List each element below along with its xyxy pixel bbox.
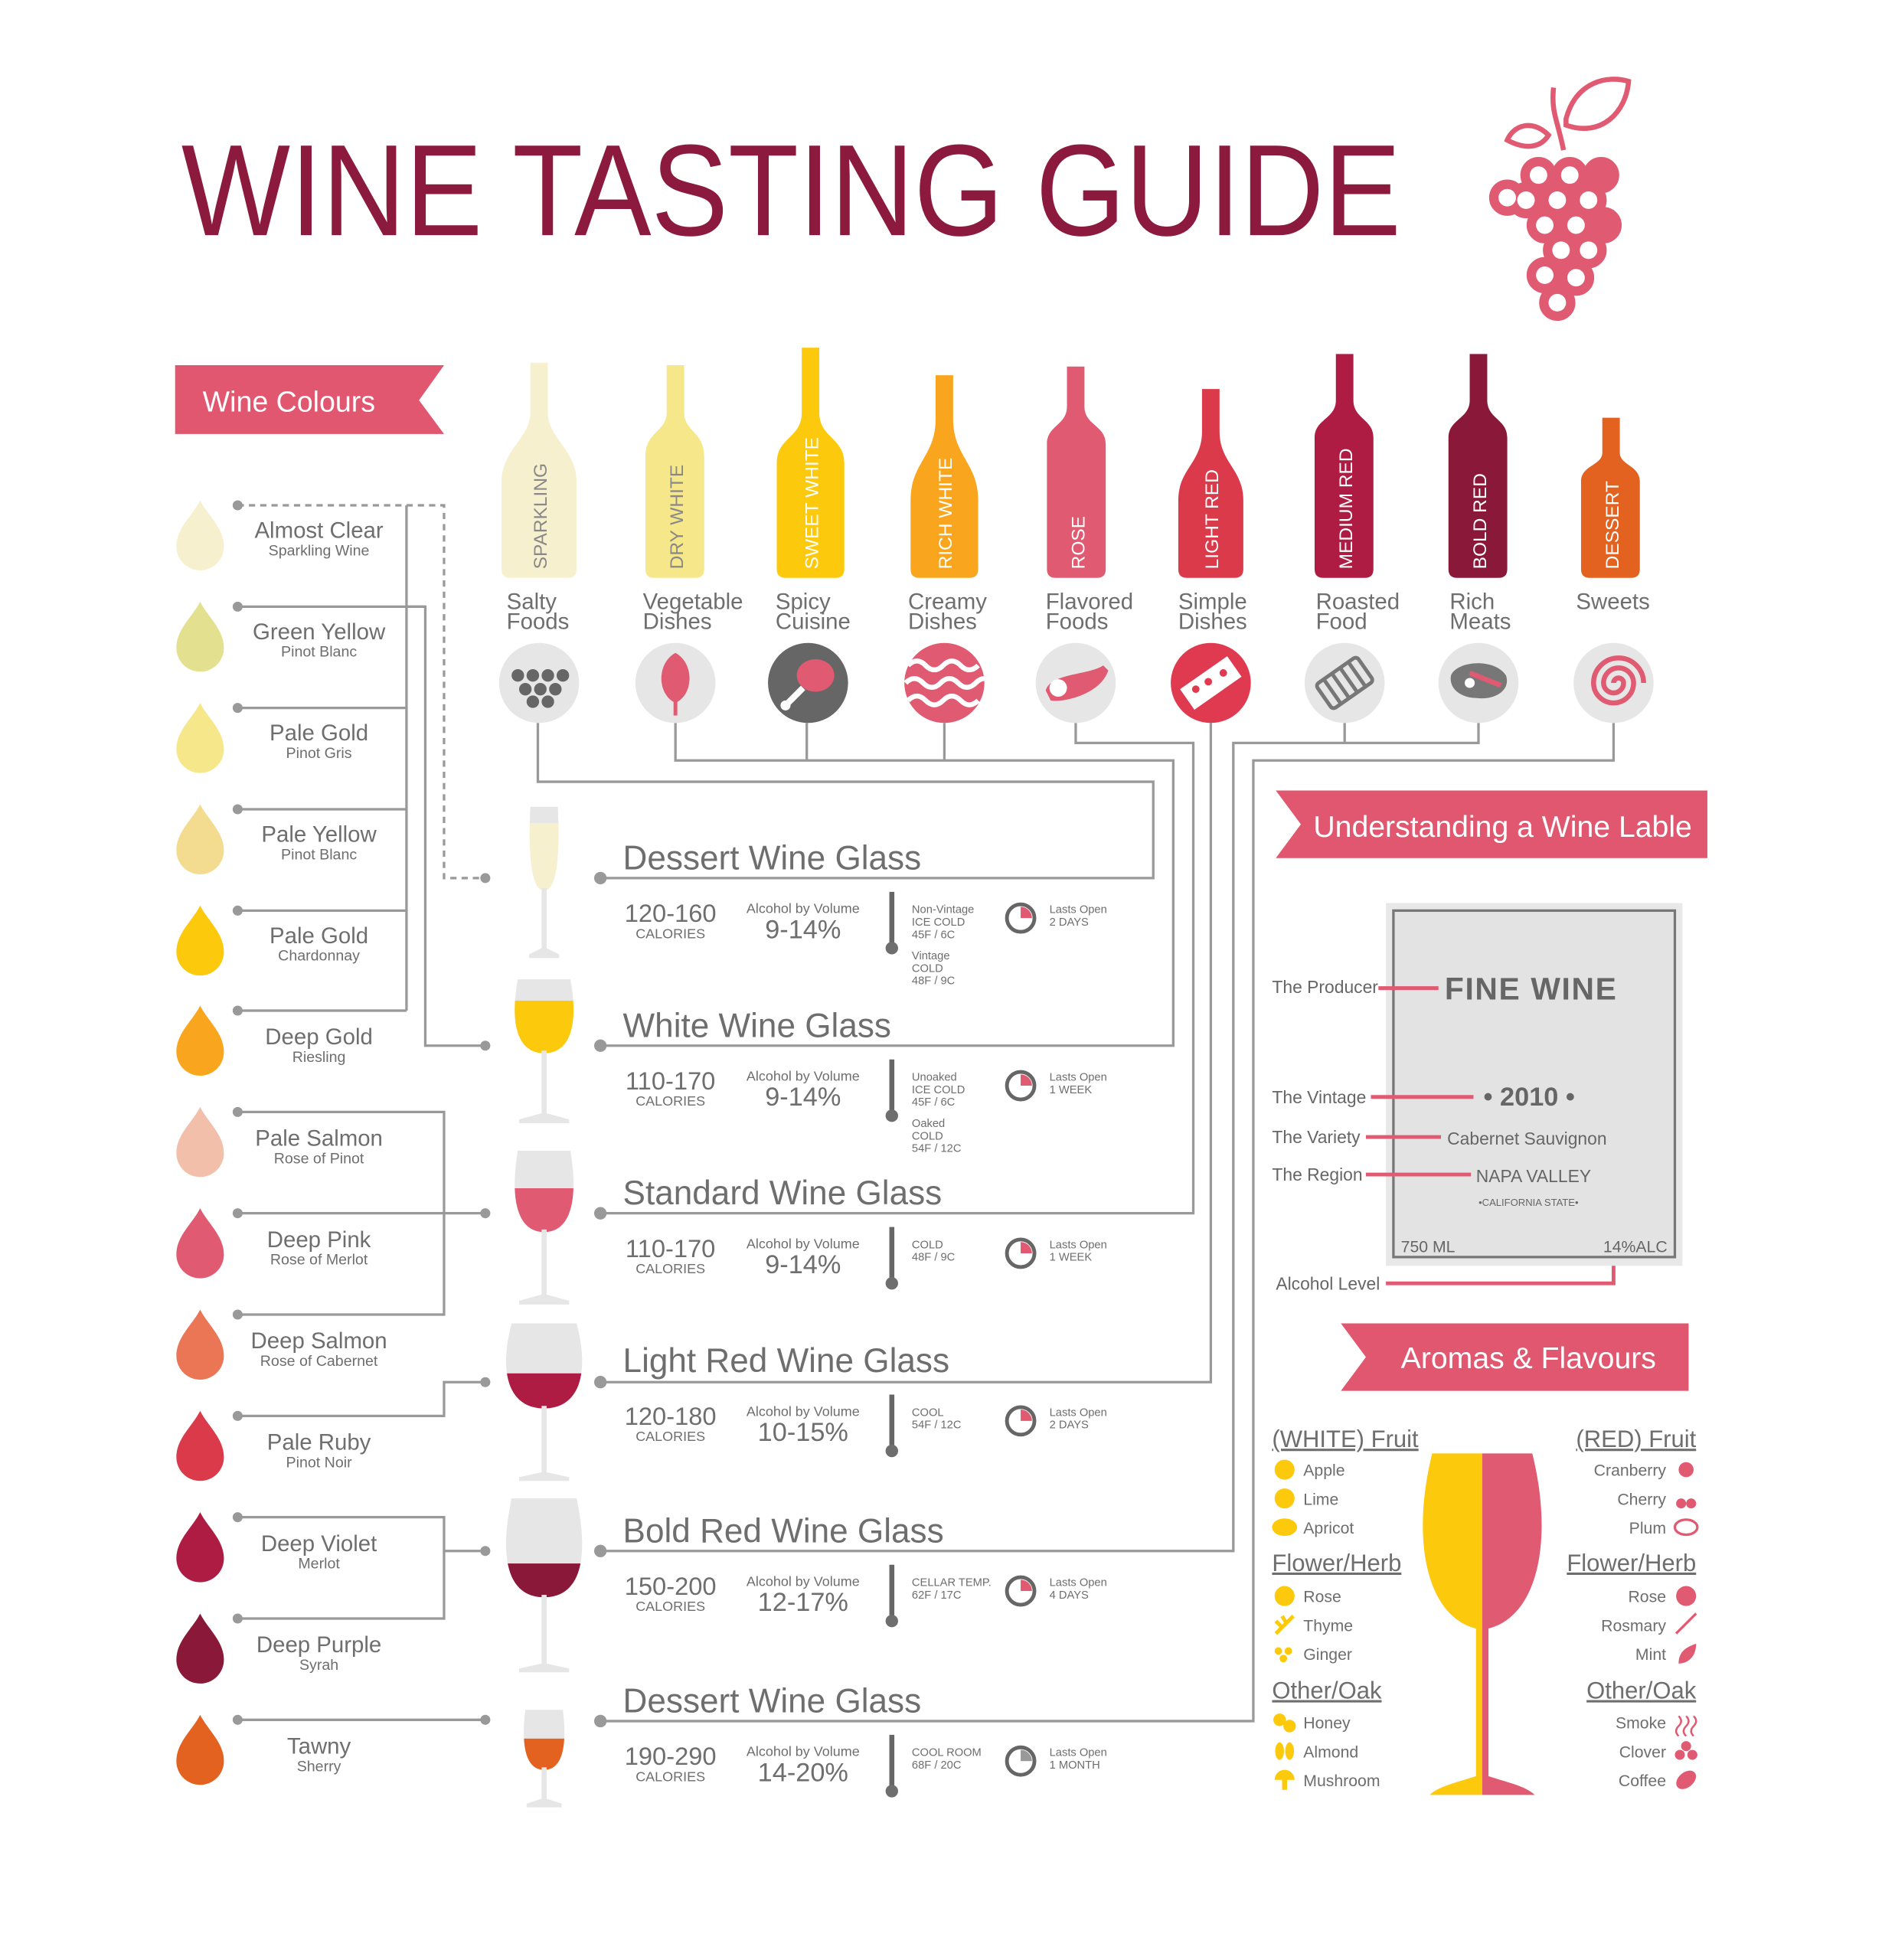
glass rows: Alcohol by Volume bbox=[747, 1403, 860, 1419]
bottles: DRY WHITE bbox=[667, 465, 688, 569]
aromas lists: Thyme bbox=[1303, 1617, 1353, 1635]
glass rows: 12-17% bbox=[758, 1588, 848, 1617]
wine label bbox=[1272, 903, 1682, 1293]
glass rows: COLD bbox=[912, 1239, 943, 1251]
glass rows: 54F / 12C bbox=[912, 1419, 962, 1432]
panel: colour drops: Rose of Pinot bbox=[274, 1150, 364, 1167]
glass rows: Lasts Open bbox=[1050, 904, 1107, 916]
wine label: The Region bbox=[1272, 1165, 1363, 1184]
banner: aromas & flavours: Aromas & Flavours bbox=[1401, 1342, 1656, 1375]
glass rows: 110-170 bbox=[626, 1234, 715, 1263]
aromas lists: Almond bbox=[1303, 1743, 1358, 1761]
panel: colour drops: Green Yellow bbox=[253, 619, 386, 645]
glass rows: CELLAR TEMP. bbox=[912, 1577, 992, 1589]
panel: colour drops: Merlot bbox=[298, 1556, 340, 1573]
food labels: Creamy bbox=[908, 590, 987, 615]
aroma icons bbox=[1272, 1460, 1700, 1793]
bottles: DESSERT bbox=[1603, 481, 1623, 569]
glass rows: Lasts Open bbox=[1050, 1072, 1107, 1084]
glass rows: CALORIES bbox=[635, 1093, 705, 1109]
wine label: The Vintage bbox=[1272, 1087, 1366, 1107]
food labels: Food bbox=[1316, 609, 1367, 635]
panel: colour drops: Rose of Cabernet bbox=[260, 1353, 378, 1370]
glass rows: 1 WEEK bbox=[1050, 1252, 1092, 1264]
wine label: 14%ALC bbox=[1603, 1238, 1668, 1256]
glass rows: 68F / 20C bbox=[912, 1759, 962, 1772]
glass rows: CALORIES bbox=[635, 1261, 705, 1276]
glass rows: Non-Vintage bbox=[912, 904, 974, 916]
aromas glass bbox=[1423, 1453, 1541, 1795]
food labels: Dishes bbox=[908, 609, 977, 635]
panel: colour drops: Pale Ruby bbox=[267, 1429, 371, 1455]
food labels: Rich bbox=[1449, 590, 1495, 615]
wine label: 750 ML bbox=[1401, 1238, 1456, 1256]
aromas lists: Honey bbox=[1303, 1715, 1351, 1733]
food labels: Meats bbox=[1449, 609, 1511, 635]
icon: grapes bbox=[1490, 79, 1629, 320]
aromas lists: Plum bbox=[1629, 1520, 1666, 1537]
glass rows: Alcohol by Volume bbox=[747, 1236, 860, 1251]
glass rows: COOL bbox=[912, 1406, 944, 1419]
aromas lists: Apple bbox=[1303, 1462, 1345, 1480]
glass rows: White Wine Glass bbox=[623, 1007, 891, 1044]
glass rows: Alcohol by Volume bbox=[747, 1744, 860, 1759]
glass rows: 120-180 bbox=[625, 1402, 717, 1430]
bottles: SWEET WHITE bbox=[802, 437, 822, 569]
panel: colour drops: Deep Purple bbox=[256, 1632, 381, 1658]
wine label: Cabernet Sauvignon bbox=[1447, 1129, 1607, 1148]
food labels: Simple bbox=[1178, 590, 1247, 615]
panel: colour drops: Rose of Merlot bbox=[270, 1252, 368, 1269]
glass rows: Lasts Open bbox=[1050, 1747, 1107, 1759]
food labels: Dishes bbox=[643, 609, 712, 635]
wine label: The Variety bbox=[1272, 1127, 1361, 1147]
aromas lists: Cherry bbox=[1617, 1491, 1666, 1508]
glass rows: Lasts Open bbox=[1050, 1577, 1107, 1589]
aromas lists: Coffee bbox=[1619, 1772, 1666, 1790]
glass rows: COOL ROOM bbox=[912, 1747, 982, 1759]
panel: colour drops: Pinot Gris bbox=[286, 745, 352, 762]
aromas lists: Other/Oak bbox=[1272, 1677, 1382, 1704]
aromas lists: Mushroom bbox=[1303, 1772, 1380, 1790]
panel: colour drops: Tawny bbox=[287, 1733, 351, 1759]
glass rows: Dessert Wine Glass bbox=[623, 839, 921, 877]
food labels: Cuisine bbox=[776, 609, 851, 635]
glass rows: ICE COLD bbox=[912, 916, 965, 929]
panel: colour drops: Syrah bbox=[299, 1657, 338, 1674]
aromas lists: Flower/Herb bbox=[1567, 1550, 1696, 1576]
aromas lists: (WHITE) Fruit bbox=[1272, 1426, 1419, 1452]
panel: colour drops: Deep Pink bbox=[267, 1227, 371, 1253]
glass rows: Bold Red Wine Glass bbox=[623, 1512, 944, 1550]
aromas lists: Clover bbox=[1619, 1743, 1666, 1761]
glass rows: Standard Wine Glass bbox=[623, 1174, 942, 1212]
glass rows: 9-14% bbox=[765, 1250, 841, 1279]
food labels: Dishes bbox=[1178, 609, 1247, 635]
glass rows: 45F / 6C bbox=[912, 929, 956, 941]
glass rows: Unoaked bbox=[912, 1072, 957, 1084]
food labels: Vegetable bbox=[643, 590, 743, 615]
aromas lists: Other/Oak bbox=[1586, 1677, 1697, 1704]
panel: colour drops bbox=[176, 500, 387, 1785]
aromas lists: (RED) Fruit bbox=[1576, 1426, 1697, 1452]
glass rows: CALORIES bbox=[635, 926, 705, 941]
glass rows: 2 DAYS bbox=[1050, 916, 1089, 929]
aromas lists: Apricot bbox=[1303, 1520, 1354, 1537]
glass rows: Alcohol by Volume bbox=[747, 901, 860, 916]
wine label: NAPA VALLEY bbox=[1476, 1166, 1591, 1186]
glass rows: Lasts Open bbox=[1050, 1239, 1107, 1251]
glass rows: CALORIES bbox=[635, 1429, 705, 1444]
glass rows: 1 WEEK bbox=[1050, 1084, 1092, 1096]
glass rows: 48F / 9C bbox=[912, 975, 956, 988]
bottles: RICH WHITE bbox=[936, 458, 956, 569]
panel: colour drops: Pale Gold bbox=[270, 720, 368, 746]
glass rows: COLD bbox=[912, 1130, 943, 1142]
bottles: ROSE bbox=[1068, 516, 1089, 569]
glass rows: Oaked bbox=[912, 1118, 945, 1130]
food labels: Foods bbox=[1046, 609, 1108, 635]
food labels: Salty bbox=[507, 590, 557, 615]
aromas lists: Ginger bbox=[1303, 1646, 1352, 1664]
panel: colour drops: Pinot Blanc bbox=[281, 644, 357, 661]
panel: colour drops: Pale Yellow bbox=[261, 822, 377, 847]
glass rows: 62F / 17C bbox=[912, 1589, 962, 1602]
panel: colour drops: Deep Gold bbox=[265, 1024, 373, 1050]
aromas lists: Smoke bbox=[1616, 1715, 1666, 1733]
panel: colour drops: Chardonnay bbox=[278, 948, 360, 965]
banner: understanding a wine label bbox=[1276, 790, 1707, 858]
glass rows: 54F / 12C bbox=[912, 1143, 962, 1155]
food labels bbox=[507, 590, 1650, 635]
connectors bbox=[237, 505, 1613, 1721]
glass rows: 190-290 bbox=[625, 1742, 717, 1770]
aromas lists: Rose bbox=[1303, 1589, 1341, 1606]
icons: clocks bbox=[1007, 904, 1034, 1775]
glass rows: 2 DAYS bbox=[1050, 1419, 1089, 1432]
food labels: Roasted bbox=[1316, 590, 1400, 615]
bottles: BOLD RED bbox=[1470, 473, 1491, 569]
aromas lists: Rose bbox=[1628, 1589, 1666, 1606]
panel: colour drops: Deep Salmon bbox=[251, 1328, 387, 1354]
glass rows: CALORIES bbox=[635, 1769, 705, 1784]
glass rows: ICE COLD bbox=[912, 1084, 965, 1096]
glass rows: 48F / 9C bbox=[912, 1252, 956, 1264]
glass rows: CALORIES bbox=[635, 1599, 705, 1614]
title: WINE TASTING GUIDE bbox=[181, 118, 1401, 263]
bottles: MEDIUM RED bbox=[1336, 448, 1357, 569]
glass rows bbox=[623, 839, 1107, 1798]
banner: understanding a wine label: Understanding a Wine Lable bbox=[1313, 811, 1692, 844]
food labels: Foods bbox=[507, 609, 569, 635]
glass rows: Lasts Open bbox=[1050, 1406, 1107, 1419]
wine label: Alcohol Level bbox=[1276, 1273, 1380, 1293]
aromas lists: Lime bbox=[1303, 1491, 1338, 1508]
bottles: LIGHT RED bbox=[1202, 469, 1223, 569]
wine label: FINE WINE bbox=[1445, 971, 1618, 1006]
aromas lists bbox=[1272, 1426, 1697, 1790]
panel: colour drops: Almost Clear bbox=[254, 518, 384, 543]
wine label: The Producer bbox=[1272, 977, 1378, 997]
food labels: Spicy bbox=[776, 590, 831, 615]
food icons bbox=[499, 643, 1654, 723]
bottles bbox=[502, 348, 1640, 578]
glass rows: 120-160 bbox=[625, 899, 717, 927]
panel: colour drops: Pinot Noir bbox=[286, 1454, 352, 1471]
wine label: • 2010 • bbox=[1484, 1083, 1575, 1112]
glass rows: Alcohol by Volume bbox=[747, 1069, 860, 1084]
glass rows: 110-170 bbox=[626, 1067, 715, 1095]
aromas lists: Cranberry bbox=[1594, 1462, 1666, 1480]
glass rows: 4 DAYS bbox=[1050, 1589, 1089, 1602]
panel: colour drops: Deep Violet bbox=[261, 1531, 377, 1557]
bottles: SPARKLING bbox=[531, 463, 551, 569]
panel: colour drops: Pinot Blanc bbox=[281, 846, 357, 863]
glass rows: Vintage bbox=[912, 950, 950, 962]
glass rows: 9-14% bbox=[765, 1083, 841, 1112]
wine label: •CALIFORNIA STATE• bbox=[1478, 1197, 1579, 1208]
aromas lists: Rosmary bbox=[1601, 1617, 1666, 1635]
panel: colour drops: Sherry bbox=[297, 1758, 341, 1775]
food labels: Sweets bbox=[1576, 590, 1650, 615]
glass rows: COLD bbox=[912, 962, 943, 975]
panel: colour drops: Sparkling Wine bbox=[269, 542, 370, 559]
glass rows: Dessert Wine Glass bbox=[623, 1683, 921, 1720]
glass rows: Alcohol by Volume bbox=[747, 1574, 860, 1589]
panel: colour drops: Pale Salmon bbox=[255, 1125, 383, 1151]
glass rows: 10-15% bbox=[758, 1418, 848, 1447]
glass rows: 1 MONTH bbox=[1050, 1759, 1100, 1772]
glasses bbox=[506, 807, 582, 1807]
banner: aromas & flavours bbox=[1341, 1323, 1688, 1391]
glass rows: 45F / 6C bbox=[912, 1096, 956, 1109]
glass rows: Light Red Wine Glass bbox=[623, 1342, 949, 1380]
panel: colour drops: Pale Gold bbox=[270, 923, 368, 949]
glass rows: 150-200 bbox=[625, 1572, 717, 1600]
panel: colour drops: Riesling bbox=[292, 1049, 345, 1066]
banner: wine colours: Wine Colours bbox=[203, 385, 375, 417]
glass rows: 14-20% bbox=[758, 1758, 848, 1787]
aromas lists: Mint bbox=[1635, 1646, 1666, 1664]
banner: wine colours bbox=[175, 365, 444, 434]
aromas lists: Flower/Herb bbox=[1272, 1550, 1401, 1576]
glass rows: 9-14% bbox=[765, 915, 841, 944]
food labels: Flavored bbox=[1046, 590, 1133, 615]
